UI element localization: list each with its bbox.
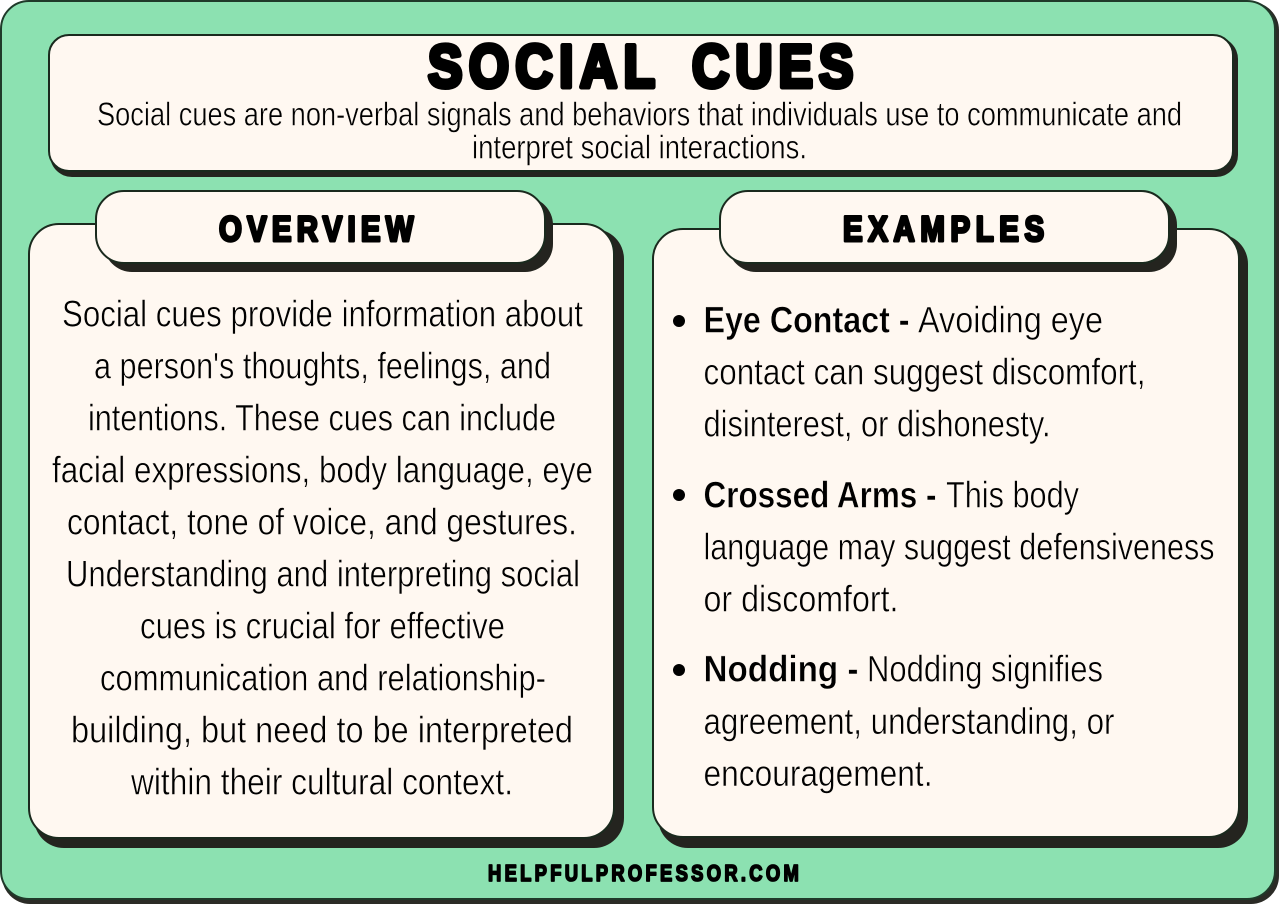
example: crossed arms: Crossed Arms - [704, 474, 936, 516]
example: nodding: encouragement. [704, 753, 932, 794]
panel: overview [29, 224, 624, 848]
example: eye contact: contact can suggest discomfort, [704, 352, 1146, 392]
overview body text: Understanding and interpreting social [66, 554, 580, 594]
overview body text: building, but need to be interpreted [71, 710, 573, 750]
example: eye contact: Avoiding eye [918, 300, 1103, 340]
overview body text: within their cultural context. [130, 762, 513, 802]
title: CUES [692, 32, 853, 100]
example: nodding: Nodding signifies [867, 648, 1103, 690]
example: crossed arms: This body [946, 474, 1079, 516]
overview body text [52, 294, 593, 802]
example: eye contact: disinterest, or dishonesty. [704, 404, 1050, 444]
overview heading: OVERVIEW [219, 210, 414, 249]
panel: examples [653, 229, 1248, 848]
examples heading: EXAMPLES [843, 210, 1044, 249]
example: nodding [673, 648, 1114, 794]
title [428, 32, 853, 100]
examples tab [720, 191, 1177, 272]
overview body text: a person's thoughts, feelings, and [94, 346, 551, 386]
overview body text: communication and relationship- [100, 658, 546, 698]
footer: website credit: HELPFULPROFESSOR.COM [488, 861, 799, 887]
overview tab [96, 191, 553, 272]
example: nodding: Nodding - [704, 648, 858, 690]
overview body text: Social cues provide information about [62, 294, 584, 334]
overview body text: facial expressions, body language, eye [52, 450, 593, 490]
overview body text: contact, tone of voice, and gestures. [67, 502, 577, 542]
example: nodding: agreement, understanding, or [704, 701, 1114, 742]
header description [97, 96, 1182, 166]
example: crossed arms [673, 474, 1214, 620]
header description: interpret social interactions. [472, 128, 807, 166]
example: eye contact [673, 300, 1146, 444]
example: eye contact: Eye Contact - [704, 300, 910, 340]
overview body text: cues is crucial for effective [140, 606, 505, 646]
panel: header [49, 32, 1238, 177]
overview body text: intentions. These cues can include [88, 398, 556, 438]
title: SOCIAL [428, 32, 655, 100]
example: crossed arms: or discomfort. [704, 578, 898, 620]
